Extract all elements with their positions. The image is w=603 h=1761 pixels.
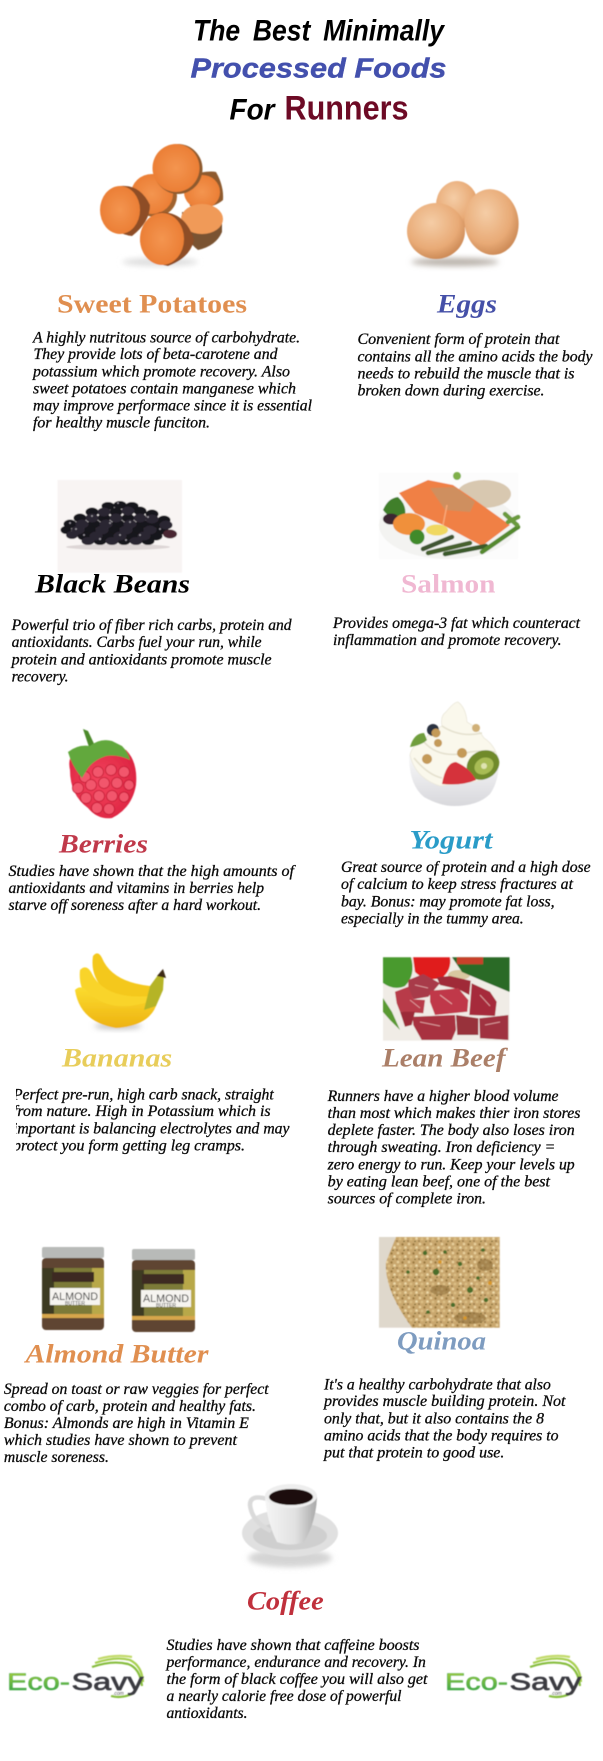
text: bananas description: Perfect pre-run, high carb snack, straight [12,1086,274,1103]
text: coffee description: the form of black coffee you will also get [166,1671,428,1688]
logo: Eco-Savy right: .com [551,1691,562,1697]
text: almond butter description [4,1381,269,1466]
text: black beans description: recovery. [12,668,69,685]
text: black beans description [11,617,292,685]
text: bananas description: from nature. High in Potassium which is [13,1103,271,1120]
icon: sweet potato slices [100,144,223,266]
text: sweet potatoes description: may improve performace since it is essential [33,397,312,414]
text: quinoa description: It's a healthy carbohydrate that also [323,1376,551,1393]
panel: almond butter [4,1247,269,1466]
text: lean beef description: sources of complete iron. [328,1190,486,1207]
title: The Best Minimally [193,15,445,48]
panel: bananas [0,953,290,1160]
text: quinoa description: provides muscle building protein. Not [323,1393,566,1410]
text: bananas description [12,1086,290,1154]
icon: salmon plate [379,472,518,559]
text: berries description: Studies have shown that the high amounts of [8,863,297,880]
icon: almond butter jars: ALMOND [143,1293,189,1305]
text: yogurt description: of calcium to keep stress fractures at [341,876,574,893]
text: berries description: antioxidants and vitamins in berries help [8,880,264,897]
icon: black beans [58,480,182,573]
title: Runners [284,90,408,128]
text: quinoa description: put that protein to good use. [323,1444,504,1461]
text: sweet potatoes description [32,329,312,431]
heading: salmon: Salmon [401,570,496,599]
text: almond butter description: combo of carb, protein and healthy fats. [4,1398,256,1415]
title: Processed Foods [190,52,446,84]
text: almond butter description: Spread on toast or raw veggies for perfect [4,1381,269,1398]
heading: berries: Berries [58,830,148,859]
panel: yogurt [341,702,591,927]
icon: almond butter jars: BUTTER [65,1301,85,1307]
logo: Eco-Savy left [7,1656,144,1697]
panel: quinoa [323,1237,566,1461]
text: coffee description: antioxidants. [166,1705,248,1722]
text: bananas description: protect you form getting leg cramps. [12,1137,245,1154]
text: coffee description [165,1637,428,1722]
text: coffee description: a nearly calorie free dose of powerful [166,1688,402,1705]
icon: coffee cup [242,1484,338,1567]
text: coffee description: performance, endurance and recovery. In [165,1654,426,1671]
heading: eggs: Eggs [436,290,497,319]
text: sweet potatoes description: They provide lots of beta-carotene and [34,346,278,363]
icon: quinoa dish [379,1237,500,1328]
text: almond butter description: muscle soreness. [4,1449,109,1466]
text: berries description: starve off soreness after a hard workout. [8,897,261,914]
text: lean beef description: than most which makes thier iron stores [328,1105,580,1122]
text: eggs description [358,331,593,399]
text: eggs description: broken down during exercise. [358,382,544,399]
text: almond butter description: Bonus: Almonds are high in Vitamin E [4,1415,249,1432]
heading: sweet potatoes: Sweet Potatoes [57,290,247,319]
text: yogurt description: bay. Bonus: may promote fat loss, [341,893,555,910]
heading: bananas: Bananas [61,1044,172,1073]
text: eggs description: Convenient form of protein that [358,331,560,348]
icon: frozen yogurt bowl [409,702,505,806]
icon: raspberry [68,729,136,818]
panel: lean beef [327,957,580,1207]
panel: eggs [358,181,593,399]
title: For [230,94,277,126]
heading: lean beef: Lean Beef [381,1044,508,1073]
panel: black beans [11,480,292,685]
panel: salmon [332,472,581,649]
text: lean beef description: deplete faster. The body also loses iron [328,1122,575,1139]
text: yogurt description [341,859,591,927]
text: black beans description: protein and antioxidants promote muscle [11,651,272,668]
logo: Eco-Savy right: Eco- [445,1669,508,1696]
text: salmon description [332,615,581,649]
logo: Eco-Savy left: Eco- [7,1669,70,1696]
text: lean beef description [327,1088,580,1207]
panel: sweet potatoes [32,144,312,431]
logo: Eco-Savy right [445,1656,582,1697]
title [190,15,446,128]
logo: Eco-Savy left: .com [113,1691,124,1697]
text: lean beef description: zero energy to run. Keep your levels up [327,1156,575,1173]
icon: almond butter jars [42,1247,195,1332]
text: sweet potatoes description: for healthy muscle funciton. [33,414,210,431]
icon: beef cubes [383,957,510,1041]
heading: yogurt: Yogurt [410,825,493,854]
text: sweet potatoes description: sweet potatoes contain manganese which [33,380,296,397]
panel: berries [8,729,297,914]
icon: bananas [75,953,166,1029]
text: black beans description: antioxidants. Carbs fuel your run, while [12,634,262,651]
text: yogurt description: especially in the tummy area. [341,910,524,927]
icon: almond butter jars: ALMOND [52,1291,98,1303]
text: black beans description: Powerful trio of fiber rich carbs, protein and [11,617,292,634]
panel: coffee [165,1484,428,1722]
text: berries description [8,863,297,914]
text: quinoa description [323,1376,566,1461]
text: quinoa description: amino acids that the body requires to [324,1427,559,1444]
text: bananas description: important is balancing electrolytes and may [13,1120,290,1137]
text: lean beef description: by eating lean beef, one of the best [328,1173,551,1190]
heading: almond butter: Almond Butter [23,1340,210,1369]
heading: quinoa: Quinoa [397,1326,486,1355]
logo: Eco-Savy right: Savy [510,1669,582,1696]
text: coffee description: Studies have shown that caffeine boosts [166,1637,420,1654]
text: yogurt description: Great source of protein and a high dose [341,859,591,876]
logo: Eco-Savy left: Savy [72,1669,144,1696]
text: sweet potatoes description: A highly nutritous source of carbohydrate. [32,329,300,346]
text: eggs description: contains all the amino acids the body [358,348,593,365]
heading: black beans: Black Beans [34,570,190,599]
icon: almond butter jars: BUTTER [156,1303,176,1309]
text: eggs description: needs to rebuild the muscle that is [358,365,574,382]
text: almond butter description: which studies have shown to prevent [4,1432,238,1449]
text: lean beef description: Runners have a higher blood volume [327,1088,559,1105]
text: salmon description: inflammation and promote recovery. [333,632,562,649]
heading: coffee: Coffee [247,1586,324,1615]
text: salmon description: Provides omega-3 fat which counteract [332,615,581,632]
text: quinoa description: only that, but it also contains the 8 [324,1410,544,1427]
text: lean beef description: through sweating. Iron deficiency = [328,1139,555,1156]
text: sweet potatoes description: potassium which promote recovery. Also [32,363,290,380]
icon: eggs [407,181,523,266]
